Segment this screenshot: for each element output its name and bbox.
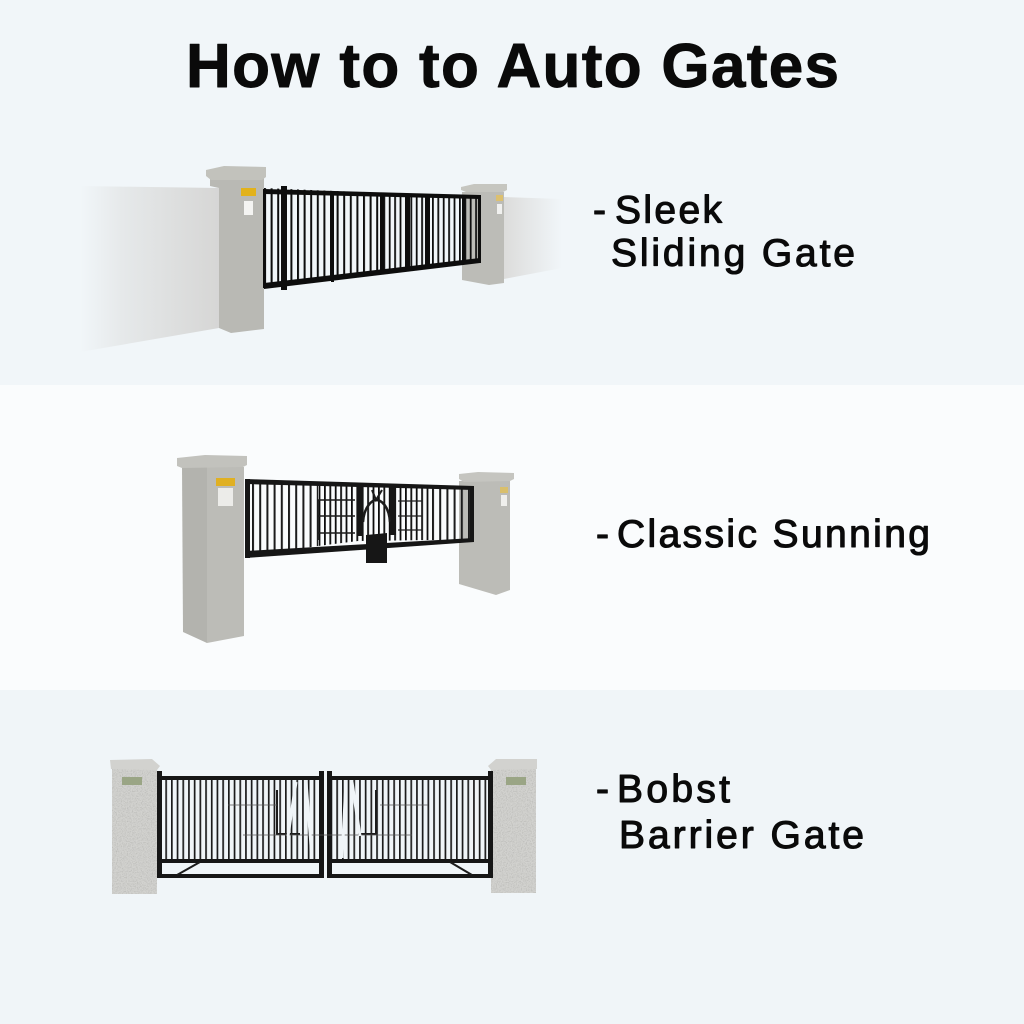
gate bars: [245, 480, 318, 557]
label: classic gate: Classic Sunning: [617, 513, 930, 556]
illustration: barrier gate: [110, 759, 537, 894]
label: barrier gate: [596, 768, 864, 857]
label: barrier gate: Bobst: [617, 768, 730, 811]
illustration: sliding gate: [80, 166, 562, 352]
gate braces and central detail: [177, 782, 472, 875]
gate grille and arch: [318, 490, 422, 540]
panel: classic gate background: [0, 385, 1024, 690]
right wall: [504, 197, 562, 279]
gate bars: [162, 779, 319, 860]
label: barrier gate: Barrier Gate: [619, 814, 864, 857]
right pillar: [459, 472, 514, 595]
illustration: classic gate: [177, 455, 514, 643]
left pillar: [110, 759, 160, 894]
left wall: [80, 186, 219, 352]
gate lock plate: [366, 533, 387, 563]
right pillar: [461, 184, 507, 285]
gate frame: [157, 771, 493, 878]
left pillar: [206, 166, 266, 333]
label: sliding gate: [593, 189, 855, 275]
gate frame: [245, 479, 474, 558]
left pillar: [177, 455, 247, 643]
label: classic gate: -: [596, 513, 609, 556]
right pillar: [488, 759, 537, 893]
label: sliding gate: Sliding Gate: [611, 232, 855, 275]
title: How to to Auto Gates: [186, 32, 839, 101]
label: sliding gate: -: [593, 189, 606, 232]
gate frame: [263, 186, 481, 290]
label: barrier gate: -: [596, 768, 609, 811]
gate bars: [264, 188, 382, 288]
label: sliding gate: Sleek: [615, 189, 722, 232]
panel: barrier gate background: [0, 690, 1024, 1024]
panel: sliding gate background: [0, 0, 1024, 385]
